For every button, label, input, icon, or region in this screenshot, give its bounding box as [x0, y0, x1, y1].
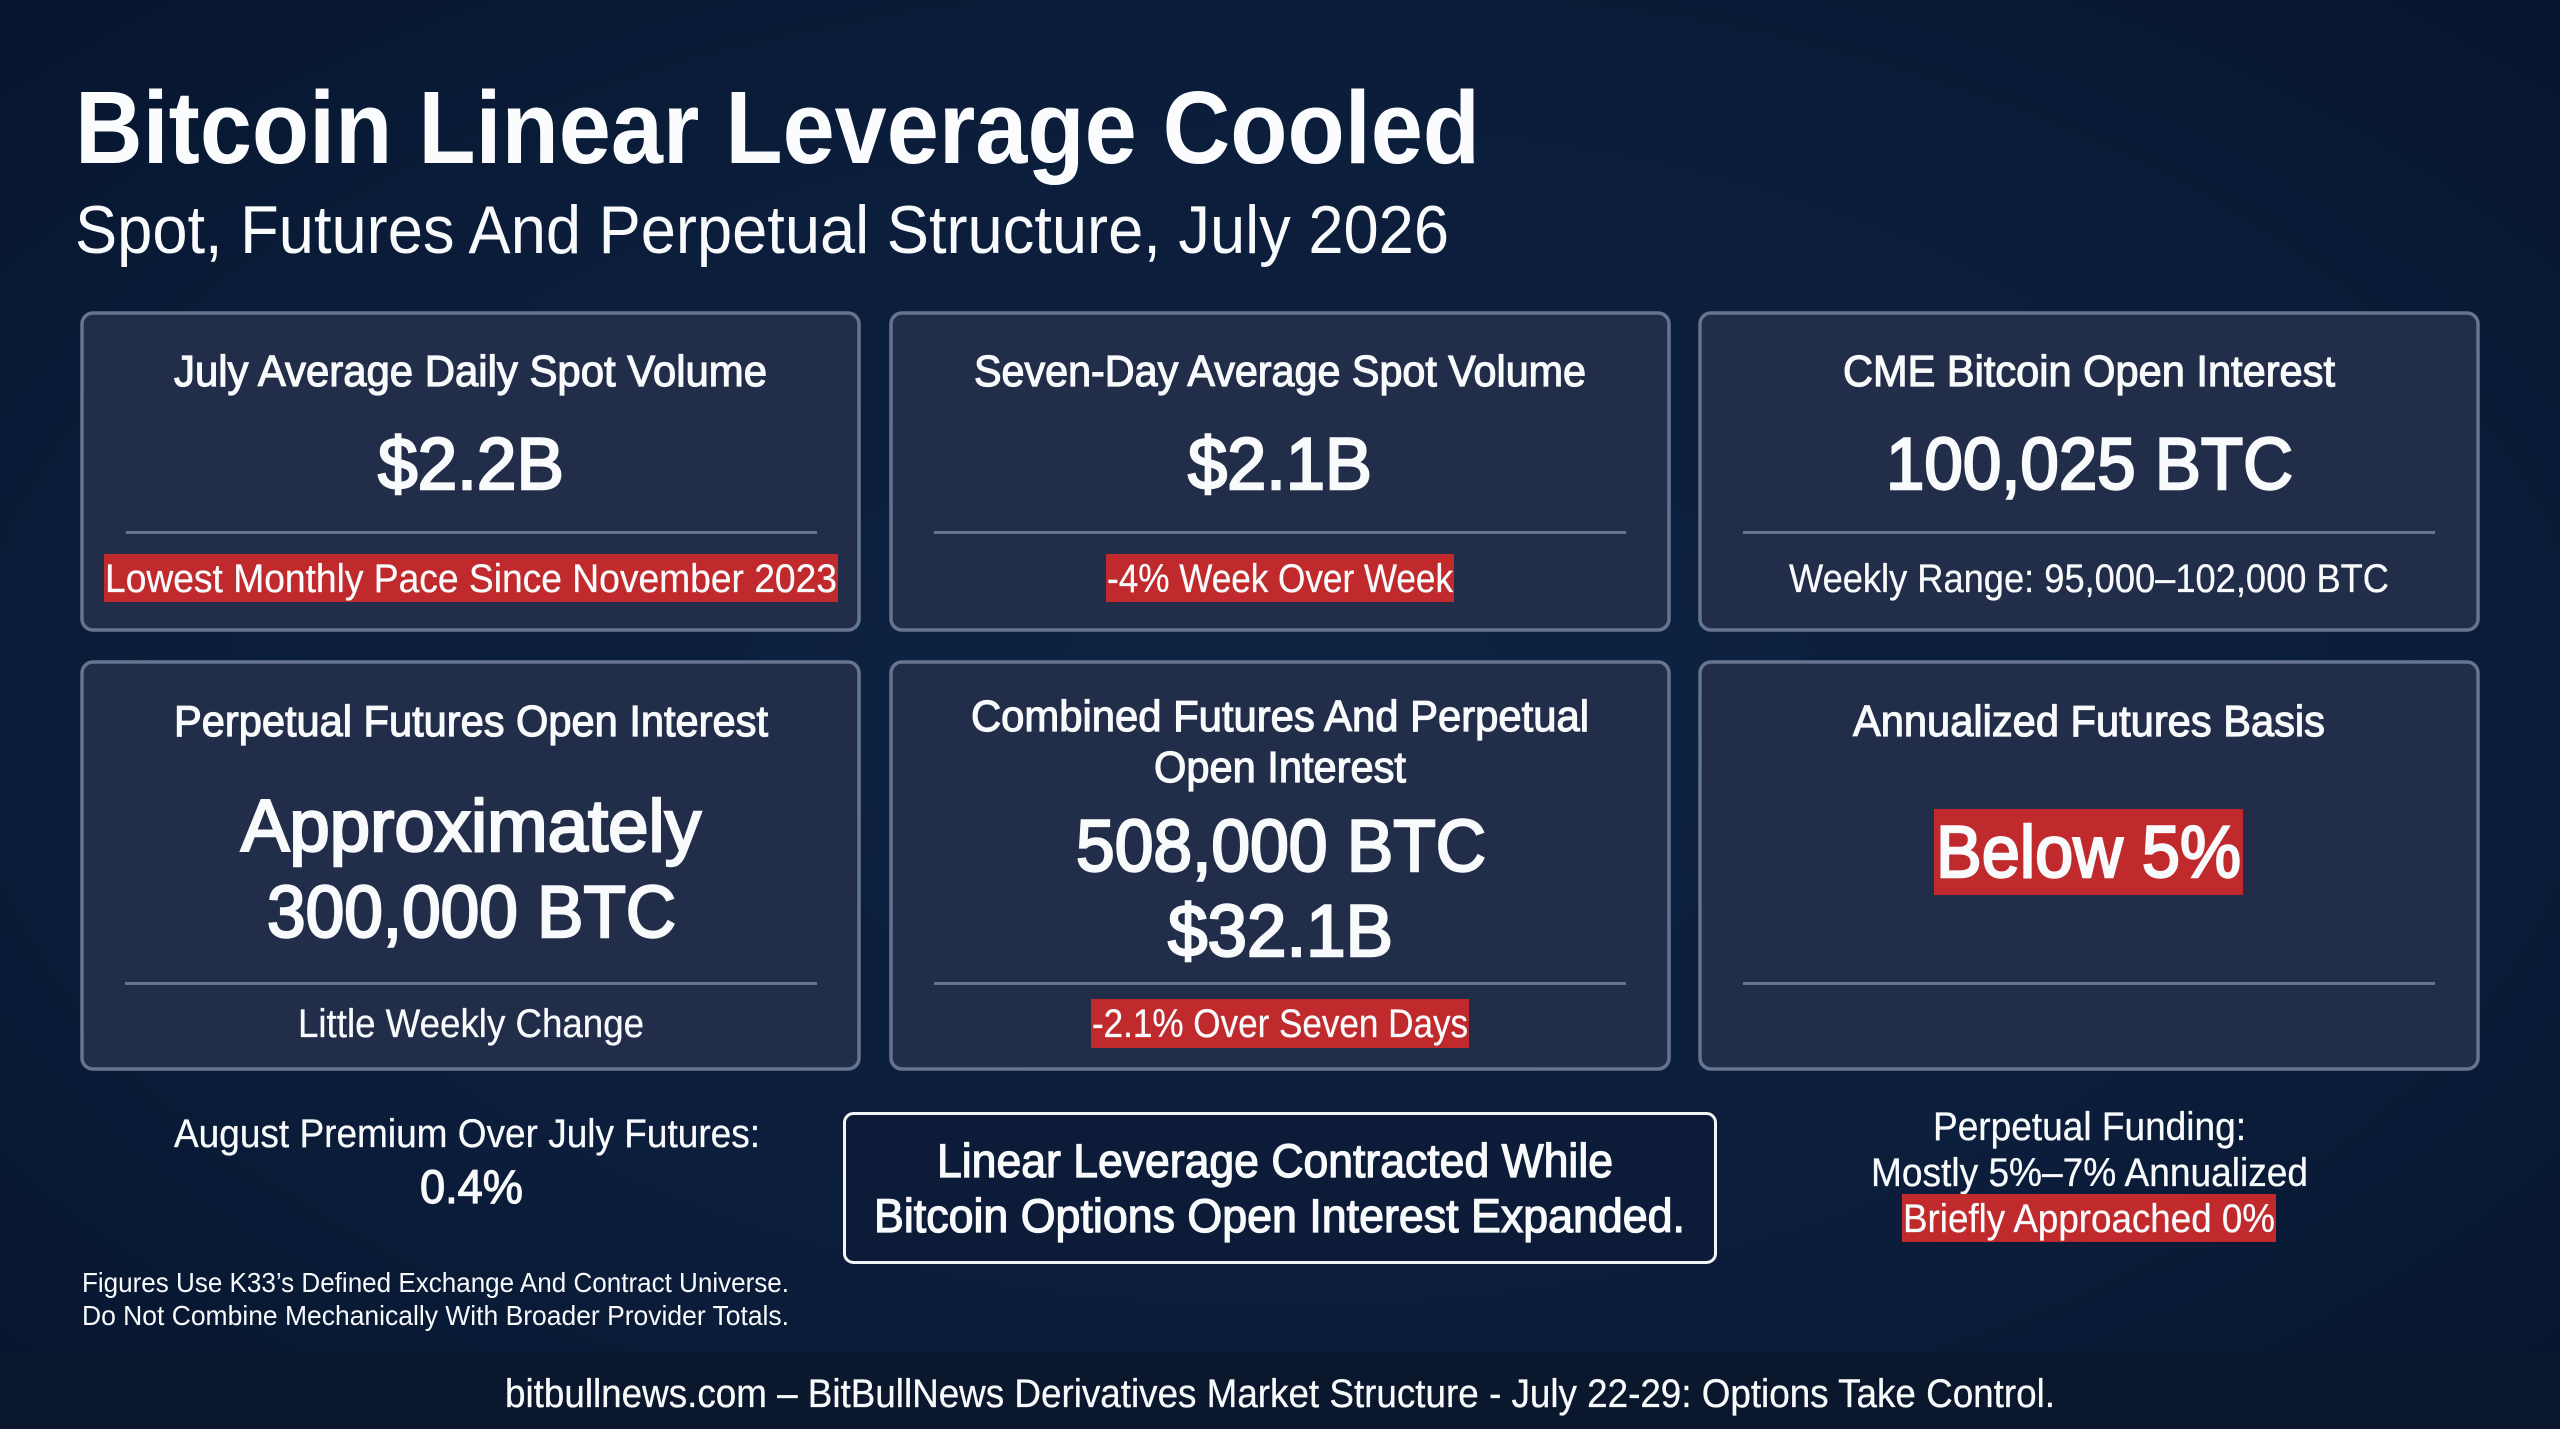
subtitle: Spot, Futures And Perpetual Structure, July 2026: [75, 192, 1449, 268]
metric value: 300,000 BTC: [267, 872, 676, 953]
callout: key takeaway box: Linear Leverage Contracted While: [937, 1134, 1613, 1187]
panel: CME bitcoin open interest: [1700, 313, 2478, 630]
callout: August premium: [174, 1112, 760, 1213]
metric value: Approximately: [241, 786, 701, 867]
panel: July average daily spot volume: [82, 313, 859, 630]
panel: annualized futures basis: [1700, 662, 2478, 1069]
panel heading: July Average Daily Spot Volume: [174, 347, 767, 396]
panel: perpetual futures open interest: [82, 662, 859, 1069]
red highlight note: -2.1% Over Seven Days: [1092, 1002, 1468, 1046]
red highlight value: Below 5%: [1936, 812, 2241, 893]
panel heading: Combined Futures And Perpetual: [971, 692, 1589, 741]
footer bar: [0, 1352, 2560, 1429]
metric value: $2.1B: [1188, 424, 1372, 505]
red highlight note: Lowest Monthly Pace Since November 2023: [105, 557, 837, 601]
callout: August premium: August Premium Over July Futures:: [174, 1112, 760, 1156]
callout: perpetual funding: [1871, 1105, 2308, 1242]
panel heading: CME Bitcoin Open Interest: [1843, 347, 2335, 396]
red highlight note: Briefly Approached 0%: [1903, 1197, 2275, 1241]
panel: combined futures and perpetual open interest: [891, 662, 1669, 1069]
red highlight note: -4% Week Over Week: [1107, 557, 1454, 601]
metric values: [1076, 806, 1486, 972]
callout: key takeaway box: [844, 1114, 1716, 1262]
callout: perpetual funding: Perpetual Funding:: [1933, 1105, 2246, 1149]
footnote: Do Not Combine Mechanically With Broader Provider Totals.: [82, 1300, 789, 1331]
panel heading: Perpetual Futures Open Interest: [174, 697, 768, 746]
weekly range note: Weekly Range: 95,000–102,000 BTC: [1789, 557, 2389, 601]
metric values: $32.1B: [1168, 891, 1393, 972]
weekly change note: Little Weekly Change: [298, 1002, 644, 1046]
metric values: 508,000 BTC: [1076, 806, 1486, 887]
footnote: [82, 1267, 789, 1331]
panel heading: [971, 692, 1589, 792]
footer bar: bitbullnews.com – BitBullNews Derivatives Market Structure - July 22-29: Options Take Control.: [505, 1372, 2055, 1416]
metric value: [241, 786, 701, 953]
panel heading: Open Interest: [1154, 743, 1406, 792]
panel heading: Annualized Futures Basis: [1853, 697, 2325, 746]
footnote: Figures Use K33’s Defined Exchange And Contract Universe.: [82, 1267, 789, 1298]
panel heading: Seven-Day Average Spot Volume: [974, 347, 1586, 396]
panel: seven-day average spot volume: [891, 313, 1669, 630]
callout: perpetual funding: Mostly 5%–7% Annualized: [1871, 1151, 2308, 1195]
title: Bitcoin Linear Leverage Cooled: [75, 70, 1480, 185]
metric value: 100,025 BTC: [1886, 424, 2293, 505]
metric value: $2.2B: [378, 424, 564, 505]
callout: August premium: 0.4%: [420, 1160, 523, 1213]
callout: key takeaway box: Bitcoin Options Open Interest Expanded.: [874, 1189, 1685, 1242]
